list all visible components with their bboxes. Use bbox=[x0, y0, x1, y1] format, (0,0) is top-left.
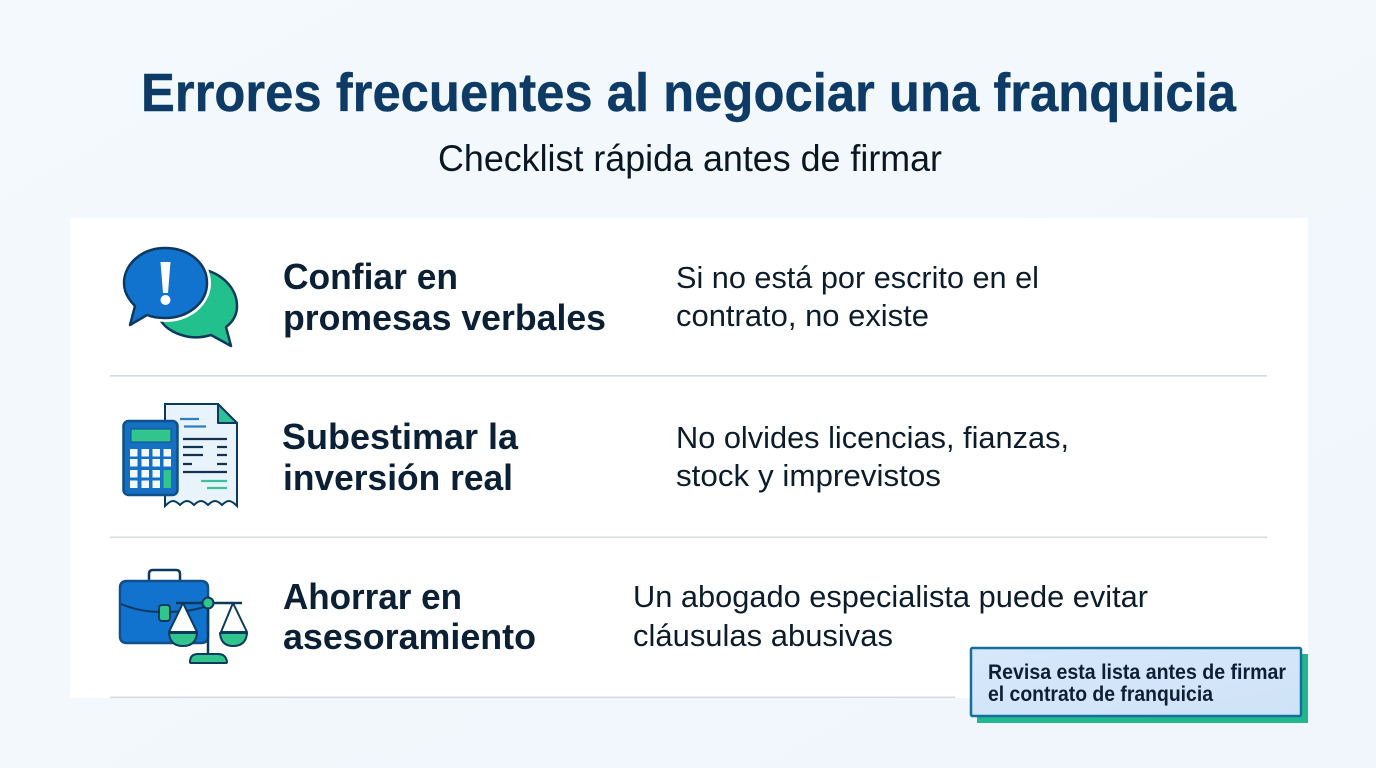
text: stock: stock y imprevistos bbox=[676, 458, 941, 493]
callout bbox=[971, 648, 1308, 723]
heading: asesoramiento: asesoramiento bbox=[283, 616, 536, 657]
heading: confiar: Confiar en bbox=[283, 256, 458, 297]
subtitle: Checklist rápida antes de firmar bbox=[438, 138, 942, 179]
heading: ahorrar: Ahorrar en bbox=[283, 576, 462, 617]
text: si no está: Si no está por escrito en el bbox=[676, 260, 1039, 295]
heading: promesas: promesas verbales bbox=[283, 297, 606, 338]
text: contrato: contrato, no existe bbox=[676, 298, 929, 333]
row 1: promesas verbales bbox=[121, 244, 1039, 346]
text: no olvides: No olvides licencias, fianzas, bbox=[676, 420, 1069, 455]
icon: briefcase and scales bbox=[120, 570, 247, 663]
callout: el contrato de franquicia bbox=[988, 683, 1213, 706]
icon: calculator and receipt bbox=[124, 404, 237, 506]
icon: speech bubbles bbox=[121, 244, 237, 346]
heading: inversión: inversión real bbox=[283, 457, 513, 498]
panel: checklist bbox=[70, 218, 1308, 698]
text: cláusulas: cláusulas abusivas bbox=[633, 618, 893, 653]
title: Errores frecuentes al negociar una franquicia bbox=[141, 63, 1237, 123]
row 3: asesoramiento bbox=[120, 570, 1148, 663]
row 2: inversión real bbox=[124, 404, 1069, 506]
callout: Revisa esta lista antes de firmar bbox=[988, 661, 1286, 684]
heading: subestimar: Subestimar la bbox=[282, 416, 519, 457]
text: un abogado: Un abogado especialista puede evitar bbox=[633, 579, 1148, 614]
